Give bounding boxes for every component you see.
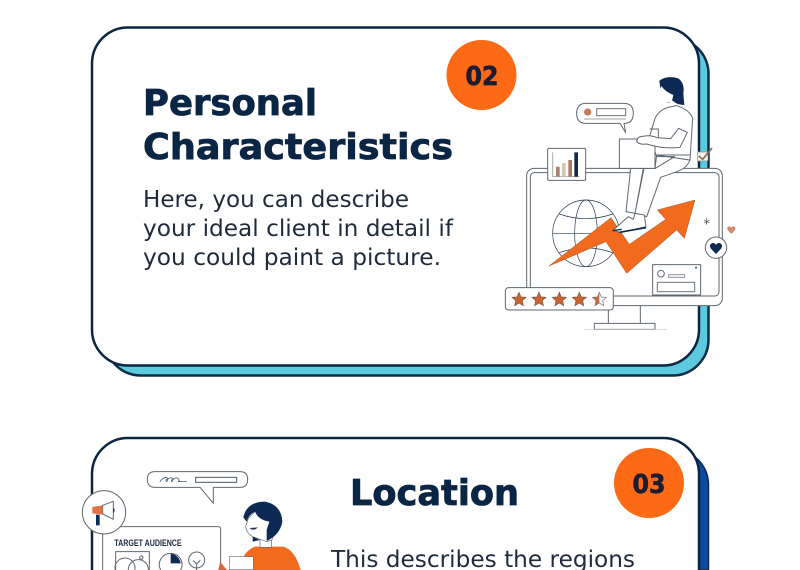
panel: location card bbox=[92, 438, 708, 570]
card front: white panel bbox=[92, 28, 699, 366]
badge: number 02: 02 bbox=[466, 62, 498, 92]
heading: Personal Characteristics: Characteristics bbox=[143, 127, 453, 168]
rating card with stars bbox=[505, 288, 613, 310]
heading: Location: Location bbox=[350, 473, 519, 514]
illustration: woman presenting target audience bbox=[82, 472, 301, 570]
label: target audience: TARGET AUDIENCE bbox=[114, 538, 182, 548]
bar chart card bbox=[548, 148, 586, 180]
badge: number 03: 03 bbox=[632, 470, 666, 500]
text block: ideal client description bbox=[143, 187, 454, 271]
icon: monitor bbox=[527, 168, 722, 329]
heading: Personal Characteristics bbox=[143, 83, 453, 168]
text block: ideal client description: your ideal client in detail if bbox=[143, 216, 454, 242]
figure: woman in orange bbox=[218, 502, 301, 570]
card back: blue offset layer bbox=[105, 449, 708, 570]
heading: Personal Characteristics: Personal bbox=[143, 83, 317, 124]
card front: white panel bbox=[92, 438, 699, 570]
text block: ideal client description: Here, you can describe bbox=[143, 187, 409, 213]
icon: asterisk bbox=[704, 218, 709, 225]
icon: check mark note bbox=[697, 148, 712, 161]
target audience panel bbox=[103, 527, 221, 570]
small info panel bbox=[653, 265, 701, 295]
icon: small heart bbox=[727, 226, 735, 234]
icon: heart in circle bbox=[705, 237, 727, 258]
card back: teal offset layer bbox=[105, 38, 708, 376]
icon: speech bubble with scribble bbox=[147, 472, 248, 503]
icon: orange rising arrow bbox=[549, 200, 695, 273]
icon: megaphone in circle bbox=[82, 491, 126, 534]
text block: ideal client description: you could paint a picture. bbox=[143, 245, 441, 271]
panel: personal characteristics card bbox=[92, 28, 708, 376]
badge: number 03 bbox=[614, 448, 684, 518]
icon: person on laptop bbox=[613, 77, 693, 233]
icon: globe bbox=[553, 200, 619, 267]
badge: number 02 bbox=[446, 40, 516, 110]
icon: speech bubble bbox=[577, 103, 633, 133]
illustration: person sitting on monitor with rising arrow bbox=[505, 77, 735, 329]
